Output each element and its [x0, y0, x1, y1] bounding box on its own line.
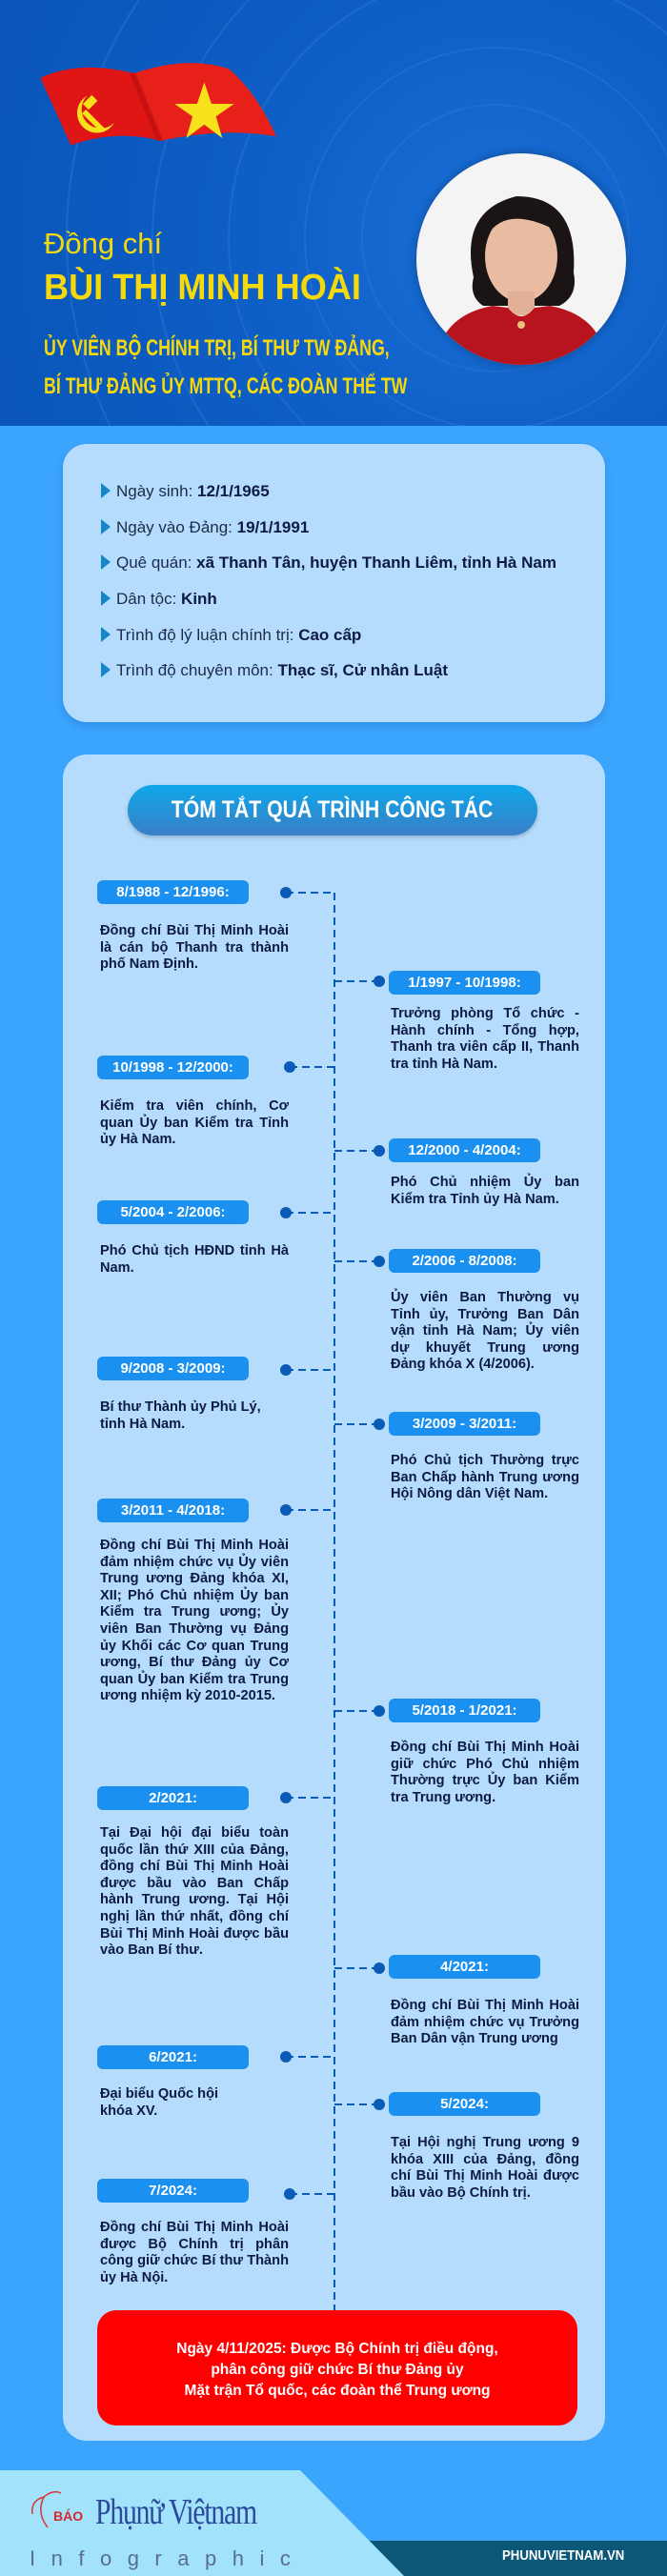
entry: 2/2021: Tại Đại hội đại biểu toàn quốc lần thứ XIII của Đảng, đồng chí Bùi Thị Minh Hoài được bầu vào Ban Chấp hành Trung ương. Tại Hội nghị lần thứ nhất, đồng chí Bùi Thị Minh Hoài được bầu vào Ban Bí thư.	[100, 1825, 289, 1958]
entry: 7/2024: Đồng chí Bùi Thị Minh Hoài được Bộ Chính trị phân công giữ chức Bí thư Thành ủy Hà Nội.	[100, 2220, 289, 2285]
title: name: BÙI THỊ MINH HOÀI	[44, 268, 361, 308]
entry: 4/2021	[389, 1955, 579, 2046]
entry: 2/2021: 2/2021:	[149, 1790, 197, 1806]
callout: latest appointment: phân công giữ chức Bí thư Đảng ủy	[211, 2362, 464, 2378]
entry: 5/2018: 5/2018 - 1/2021:	[412, 1702, 517, 1719]
entry: 7/2024: 7/2024:	[149, 2183, 197, 2199]
entry: 5/2024: Tại Hội nghị Trung ương 9 khóa XIII của Đảng, đồng chí Bùi Thị Minh Hoài được bầu vào Bộ Chính trị.	[391, 2135, 579, 2201]
logo: Bao Phu nu Viet nam: Phụnữ Việtnam	[95, 2492, 256, 2532]
subtitle: positions: BÍ THƯ ĐẢNG ỦY MTTQ, CÁC ĐOÀN THỂ TW	[44, 373, 407, 399]
entry: 5/2024: 5/2024:	[440, 2096, 489, 2112]
entry: 3/2009: Phó Chủ tịch Thường trực Ban Chấp hành Trung ương Hội Nông dân Việt Nam.	[391, 1453, 579, 1501]
callout: latest appointment	[97, 2310, 577, 2425]
entry: 8/1988: 8/1988 - 12/1996:	[116, 884, 230, 900]
callout: latest appointment: Mặt trận Tổ quốc, các đoàn thể Trung ương	[184, 2383, 491, 2399]
entry: 8/1988	[97, 880, 289, 972]
entry: 2/2006	[389, 1249, 579, 1372]
entry: 12/2000: Phó Chủ nhiệm Ủy ban Kiểm tra Tỉnh ủy Hà Nam.	[391, 1175, 579, 1207]
logo: Bao Phu nu Viet nam	[31, 2490, 257, 2532]
info: political theory: Trình độ lý luận chính trị: Cao cấp	[116, 626, 361, 644]
entry: 12/2000: 12/2000 - 4/2004:	[408, 1142, 521, 1158]
entry: 10/1998: Kiểm tra viên chính, Cơ quan Ủy ban Kiểm tra Tỉnh ủy Hà Nam.	[100, 1098, 289, 1147]
entry: 9/2008: 9/2008 - 3/2009:	[120, 1360, 226, 1377]
logo: Bao Phu nu Viet nam: BÁO	[53, 2508, 83, 2524]
icon: flags	[40, 63, 276, 145]
text: Dong chi: Đồng chí	[44, 227, 162, 260]
info: birth date: Ngày sinh: 12/1/1965	[116, 482, 270, 500]
entry: 5/2004: Phó Chủ tịch HĐND tỉnh Hà Nam.	[100, 1243, 289, 1276]
entry: 3/2011: 3/2011 - 4/2018:	[121, 1502, 225, 1519]
heading: timeline title	[128, 785, 537, 835]
entry: 5/2024	[389, 2092, 579, 2201]
entry: 9/2008: Bí thư Thành ủy Phủ Lý, tỉnh Hà Nam.	[100, 1399, 261, 1432]
subtitle: positions: ỦY VIÊN BỘ CHÍNH TRỊ, BÍ THƯ TW ĐẢNG,	[44, 335, 390, 361]
entry: 6/2021: Đại biểu Quốc hội khóa XV.	[100, 2086, 218, 2119]
entry: 9/2008	[97, 1357, 261, 1432]
entry: 1/1997: Trưởng phòng Tổ chức - Hành chính - Tổng hợp, Thanh tra viên cấp II, Thanh tra tỉnh Hà Nam.	[391, 1006, 579, 1072]
info: party join date: Ngày vào Đảng: 19/1/1991	[116, 518, 309, 536]
entry: 6/2021: 6/2021:	[149, 2049, 197, 2065]
entry: 3/2009: 3/2009 - 3/2011:	[413, 1416, 516, 1432]
entry: 2/2006: Ủy viên Ban Thường vụ Tỉnh ủy, Trưởng Ban Dân vận tỉnh Hà Nam; Ủy viên dự khuyết Trung ương Đảng khóa X (4/2006).	[391, 1290, 579, 1372]
panel: career timeline	[63, 755, 605, 2441]
entry: 2/2006: 2/2006 - 8/2008:	[412, 1253, 517, 1269]
entry: 5/2004	[97, 1200, 290, 1276]
entry: 1/1997: 1/1997 - 10/1998:	[408, 975, 521, 991]
entry: 3/2009	[389, 1412, 579, 1501]
panel: personal info	[63, 444, 605, 722]
entry: 12/2000	[389, 1138, 579, 1207]
info: ethnicity: Dân tộc: Kinh	[116, 590, 217, 608]
entry: 7/2024	[97, 2179, 289, 2285]
entry: 10/1998: 10/1998 - 12/2000:	[112, 1059, 233, 1076]
portrait photo	[416, 153, 626, 365]
entry: 3/2011: Đồng chí Bùi Thị Minh Hoài đảm nhiệm chức vụ Ủy viên Trung ương Đảng khóa XI, XII; Phó Chủ nhiệm Ủy ban Kiểm tra Trung ương; Ủy viên Ban Thường vụ Đảng ủy Khối các Cơ quan Trung ương, Bí thư Đảng ủy Cơ quan Ủy ban Kiểm tra Trung ương nhiệm kỳ 2010-2015.	[100, 1538, 289, 1703]
text: Infographic: Infographic	[30, 2546, 306, 2570]
heading: timeline title: TÓM TẮT QUÁ TRÌNH CÔNG TÁC	[172, 796, 494, 823]
entry: 8/1988: Đồng chí Bùi Thị Minh Hoài là cán bộ Thanh tra thành phố Nam Định.	[100, 923, 289, 972]
entry: 4/2021: Đồng chí Bùi Thị Minh Hoài đảm nhiệm chức vụ Trưởng Ban Dân vận Trung ương	[391, 1998, 579, 2046]
entry: 10/1998	[97, 1056, 289, 1147]
entry: 5/2018	[389, 1699, 579, 1805]
subtitle: positions	[44, 334, 408, 399]
text: website: PHUNUVIETNAM.VN	[502, 2547, 624, 2564]
entry: 4/2021: 4/2021:	[440, 1959, 489, 1975]
entry: 1/1997	[389, 971, 579, 1072]
callout: latest appointment: Ngày 4/11/2025: Được Bộ Chính trị điều động,	[176, 2341, 498, 2357]
header banner	[0, 0, 667, 426]
entry: 5/2018: Đồng chí Bùi Thị Minh Hoài giữ chức Phó Chủ nhiệm Thường trực Ủy ban Kiểm tra Trung ương.	[391, 1740, 579, 1805]
info: education: Trình độ chuyên môn: Thạc sĩ, Cử nhân Luật	[116, 661, 448, 679]
entry: 6/2021	[97, 2045, 249, 2119]
entry: 5/2004: 5/2004 - 2/2006:	[120, 1204, 226, 1220]
info: hometown: Quê quán: xã Thanh Tân, huyện Thanh Liêm, tỉnh Hà Nam	[116, 553, 556, 572]
footer	[0, 2470, 667, 2576]
